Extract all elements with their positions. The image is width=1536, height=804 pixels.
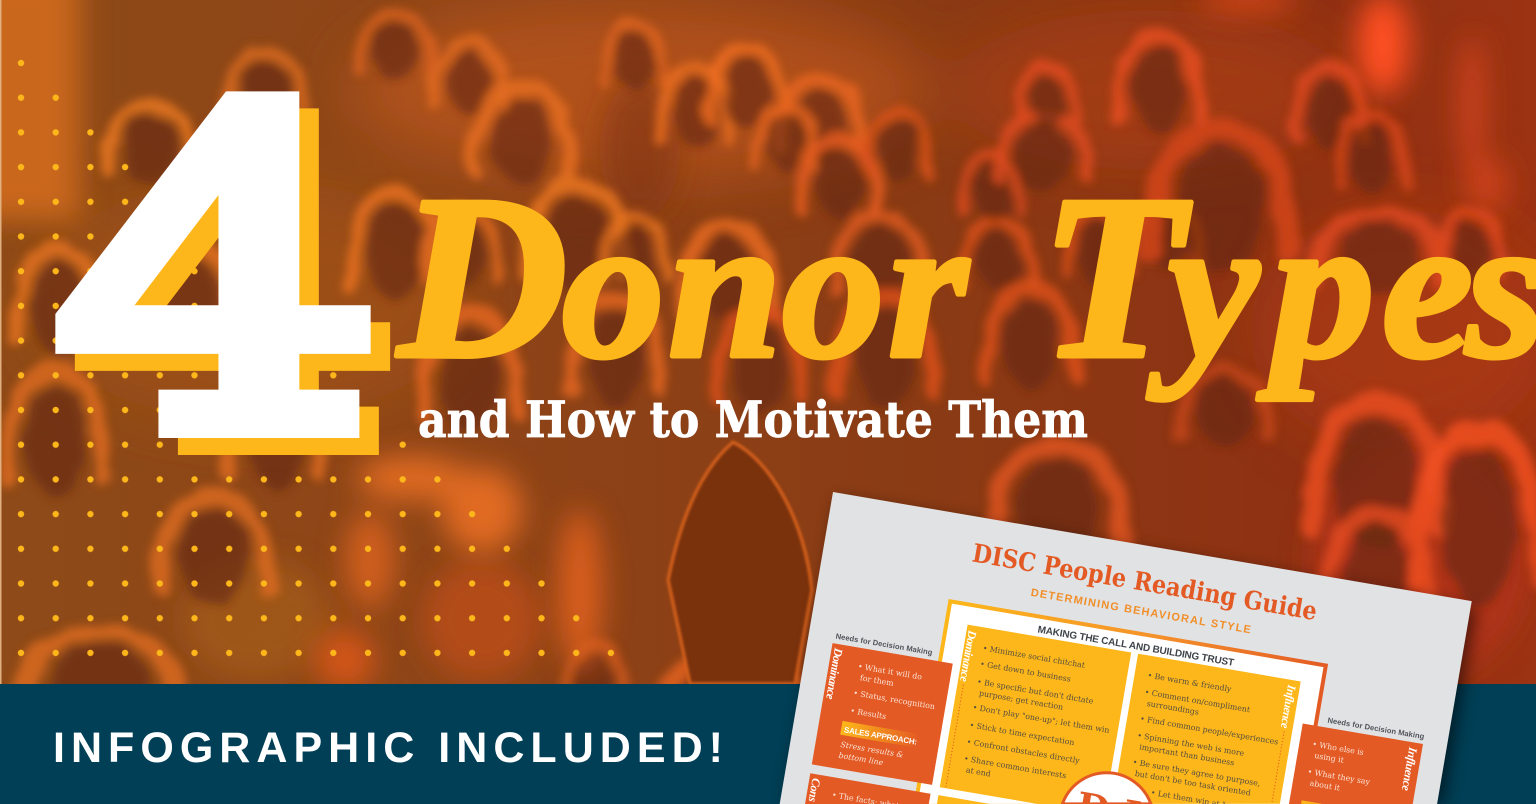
orange panel: influence needs: • Who else is bbox=[1312, 739, 1364, 757]
orange panel: dominance needs bbox=[812, 643, 953, 785]
numeral 4 face: 4 bbox=[55, 24, 381, 527]
influence list: • Spinning the web is more bbox=[1137, 731, 1245, 758]
dominance list: purpose; get reaction bbox=[978, 689, 1064, 712]
center frame bbox=[914, 599, 1328, 804]
dominance list: • Stick to time expectation bbox=[969, 720, 1075, 747]
yellow panel: influence bbox=[1112, 654, 1301, 804]
script title: Donor Types: o bbox=[782, 174, 884, 401]
influence list: surroundings bbox=[1146, 699, 1200, 717]
dominance list bbox=[961, 644, 1120, 797]
script title: Donor Types: o bbox=[562, 174, 664, 401]
script title: Donor Types: D bbox=[396, 147, 568, 407]
dominance list: • Get down to business bbox=[979, 659, 1071, 684]
guide subtitle: DETERMINING BEHAVIORAL STYLE bbox=[1030, 587, 1252, 636]
needs heading right: Needs for Decision Making bbox=[1327, 716, 1425, 741]
numeral 4 bbox=[55, 24, 400, 544]
script title: Donor Types: p bbox=[1257, 174, 1374, 401]
influence list: • Comment on/compliment bbox=[1144, 687, 1252, 714]
script title: Donor Types bbox=[396, 147, 1536, 407]
DISC guide document bbox=[780, 492, 1478, 804]
dominance list: • Confront obstacles directly bbox=[966, 737, 1081, 765]
orange panel: conscientiousness needs bbox=[805, 773, 931, 804]
frame heading: MAKING THE CALL AND BUILDING TRUST bbox=[1037, 625, 1235, 669]
influence list: important than business bbox=[1139, 742, 1235, 767]
influence list: but don't be too task oriented bbox=[1134, 769, 1251, 798]
yellow panel: dominance bbox=[939, 624, 1131, 804]
orange panel: dominance needs: • What it will do bbox=[857, 662, 923, 682]
orange panel: influence needs: • What they say bbox=[1307, 767, 1371, 787]
script title: Donor Types: T bbox=[1040, 147, 1192, 407]
orange panel: influence needs bbox=[1289, 723, 1423, 804]
label: Dominance bbox=[823, 646, 846, 701]
sales approach bar bbox=[840, 721, 920, 748]
orange panel: dominance needs: bottom line bbox=[838, 751, 884, 767]
influence list bbox=[1128, 671, 1286, 804]
dominance list: • Don't play "one-up"; let them win bbox=[972, 703, 1110, 735]
dominance list: • Minimize social chitchat bbox=[982, 644, 1087, 670]
needs heading left: Needs for Decision Making bbox=[835, 632, 933, 657]
orange panel: influence needs: about it bbox=[1309, 779, 1342, 793]
influence list: • Be sure they agree to purpose, bbox=[1132, 757, 1261, 788]
guide title: DISC People Reading Guide bbox=[970, 539, 1319, 627]
label: Influence bbox=[1399, 745, 1420, 793]
dominance list: • Be specific but don't dictate bbox=[976, 677, 1094, 706]
label: Influence bbox=[1278, 683, 1299, 730]
orange panel: influence needs: using it bbox=[1314, 751, 1345, 765]
dominance list: at end bbox=[965, 765, 991, 779]
influence list: • Find common people/experiences bbox=[1139, 714, 1279, 747]
script title: Donor Types: e bbox=[1382, 174, 1473, 401]
numeral 4 shadow: 4 bbox=[74, 41, 400, 544]
orange panel: dominance needs: for them bbox=[859, 673, 895, 688]
bottom banner bbox=[0, 684, 1536, 804]
subtitle: and How to Motivate Them bbox=[418, 390, 1088, 449]
yellow panel: conscientiousness bbox=[937, 795, 990, 804]
paper bbox=[780, 492, 1472, 804]
center circle bbox=[1059, 766, 1155, 804]
dominance list: • Share common interests bbox=[963, 754, 1067, 780]
dot pattern triangle bbox=[18, 60, 614, 656]
label: Dominance bbox=[957, 628, 980, 684]
influence list: • Be warm & friendly bbox=[1147, 671, 1233, 694]
orange panel: dominance needs: • Status, recognition bbox=[853, 688, 936, 711]
script title: Donor Types: n bbox=[668, 174, 782, 401]
script title: Donor Types: y bbox=[1147, 174, 1260, 401]
banner text: INFOGRAPHIC INCLUDED! bbox=[53, 724, 723, 772]
orange panel: dominance needs: Stress results & bbox=[840, 740, 904, 760]
orange panel: dominance needs: • Results bbox=[850, 706, 887, 721]
orange panel: dominance needs: SALES APPROACH: bbox=[843, 725, 918, 747]
orange panel: conscientiousness needs: Cons bbox=[806, 777, 823, 803]
script title: Donor Types: r bbox=[888, 174, 970, 401]
